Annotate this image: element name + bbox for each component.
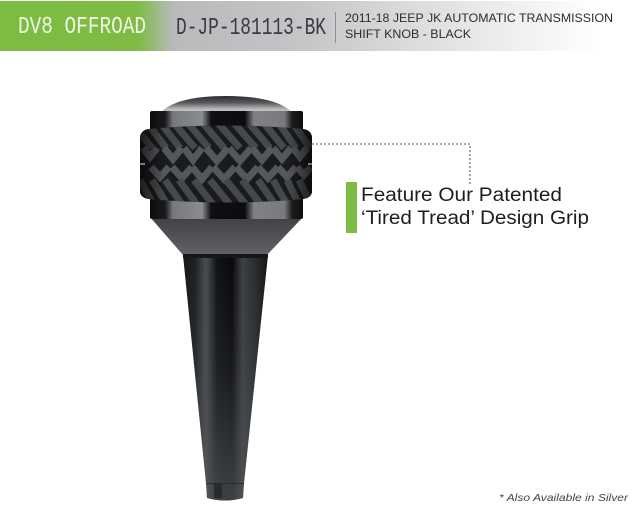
callout text: Feature Our Patented [361, 185, 562, 206]
product subtitle: SHIFT KNOB - BLACK [345, 27, 471, 41]
part number: D-JP-181113-BK [176, 15, 326, 42]
green accent bar [346, 182, 357, 233]
cone [150, 217, 303, 255]
lower diagonal lugs [140, 180, 310, 206]
header band [0, 1, 613, 51]
callout: tread feature: ‘Tired Tread’ Design Grip [361, 208, 589, 229]
shift knob product illustration [136, 96, 313, 500]
callout: tread feature [346, 182, 589, 233]
chevron rows [143, 148, 311, 179]
stem [183, 255, 268, 500]
brand name: DV8 OFFROAD [18, 14, 146, 41]
tire tread grip [140, 126, 312, 202]
dotted callout leader [312, 144, 470, 184]
upper diagonal lugs [136, 122, 310, 148]
product title: 2011-18 JEEP JK AUTOMATIC TRANSMISSION [345, 11, 613, 25]
dome [160, 96, 293, 113]
upper collar [150, 111, 303, 131]
lower collar [150, 196, 303, 219]
footnote: * Also Available in Silver [499, 492, 629, 504]
